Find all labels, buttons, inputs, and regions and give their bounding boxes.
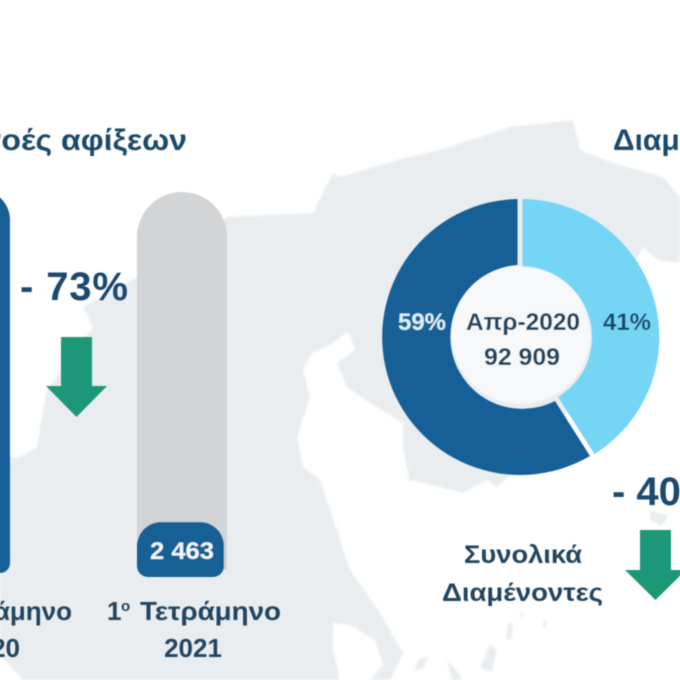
bar: first four months 2020 xyxy=(0,190,10,573)
value pill: 2 463 xyxy=(137,522,224,577)
label: period 2021: 1 xyxy=(107,596,121,626)
icon: down arrow right xyxy=(625,530,680,600)
label: total residents: Συνολικά xyxy=(464,541,583,569)
donut chart xyxy=(382,199,659,475)
donut segment 59% xyxy=(382,199,590,475)
label 41%: 41% xyxy=(603,309,651,336)
label: total residents: Διαμένοντες xyxy=(442,579,603,607)
donut centre label: 92 909 xyxy=(484,344,560,371)
label: period 2021: ο xyxy=(121,598,130,615)
donut hole xyxy=(452,266,590,404)
label: total residents xyxy=(442,541,603,607)
icon: down arrow left xyxy=(46,337,107,417)
change: -40%: - 40 xyxy=(612,470,680,514)
change: -73%: - 73% xyxy=(20,265,128,309)
label: period 2021: Τετράμηνο xyxy=(140,596,281,626)
bar: first four months 2021 xyxy=(137,192,227,577)
label: period 2021: 2021 xyxy=(164,633,222,663)
label 59%: 59% xyxy=(398,309,446,336)
donut centre label xyxy=(466,309,580,371)
value pill: 2 463: 2 463 xyxy=(150,538,214,565)
heading: residents: Διαμ xyxy=(613,124,680,157)
donut centre label: Απρ-2020 xyxy=(466,309,580,336)
label: period 2021 xyxy=(107,596,281,663)
donut segment 41% xyxy=(522,199,659,454)
label: period 2020 xyxy=(0,596,72,663)
